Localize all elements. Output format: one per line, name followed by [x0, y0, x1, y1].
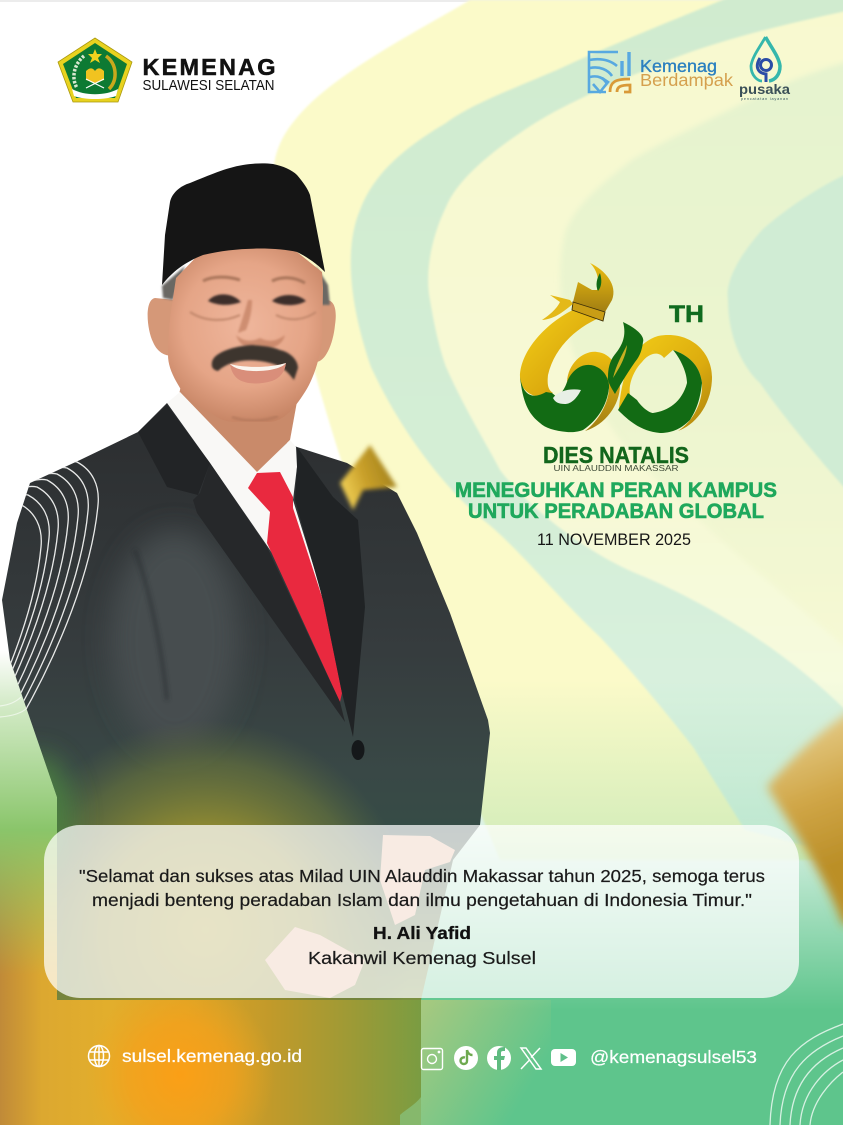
jacket button — [352, 740, 364, 760]
logo: pusaka: pencatatan layanan — [741, 97, 788, 101]
quote card — [44, 825, 799, 998]
neck — [178, 380, 300, 473]
icon: tiktok — [454, 1046, 478, 1070]
header brand text: KEMENAG — [142, 54, 276, 80]
nose shadow — [236, 300, 285, 349]
number 6 green swirl — [520, 364, 610, 432]
torch collar — [572, 302, 605, 321]
title block — [455, 442, 777, 549]
logo: Kemenag Berdampak: Kemenag — [640, 56, 717, 76]
theme line two: UNTUK PERADABAN GLOBAL — [468, 500, 764, 523]
TH: TH — [669, 301, 704, 328]
icon: X — [521, 1048, 541, 1069]
logo: pusaka: pusaka — [739, 81, 790, 97]
suit lighting and fade — [10, 462, 380, 1000]
header brand text: SULAWESI SELATAN — [142, 77, 274, 94]
role: Kakanwil Kemenag Sulsel — [308, 948, 536, 968]
footer website: sulsel.kemenag.go.id — [122, 1046, 302, 1066]
ears — [148, 298, 336, 362]
logo: Kemenag Berdampak — [589, 52, 733, 92]
left lapel — [138, 405, 210, 495]
person portrait — [0, 163, 490, 1000]
white cloud — [553, 389, 581, 404]
face — [168, 246, 323, 422]
red tie — [248, 472, 342, 702]
torch ribbon — [542, 295, 573, 320]
quote text — [79, 866, 765, 910]
footer social — [422, 1046, 757, 1070]
clasped hands — [265, 835, 455, 998]
quote text: menjadi benteng peradaban Islam dan ilmu pengetahuan di Indonesia Timur." — [92, 890, 752, 910]
number 0 gold — [619, 335, 712, 431]
university name: UIN ALAUDDIN MAKASSAR — [554, 463, 678, 473]
line pattern bottom right — [770, 1024, 843, 1125]
footer social: @kemenagsulsel53 — [590, 1047, 757, 1067]
suit jacket — [2, 403, 490, 1000]
number 6 gold body — [520, 310, 604, 396]
Dies Natalis heading: DIES NATALIS — [543, 442, 689, 468]
right lapel — [295, 447, 365, 737]
eyes and brows — [190, 277, 316, 320]
chin shadow — [232, 416, 278, 421]
moustache — [212, 345, 298, 380]
faint lines on background left — [0, 697, 27, 717]
icon: youtube — [551, 1049, 576, 1066]
number 6 gold loop — [567, 352, 620, 431]
logo: Kemenag emblem — [58, 38, 132, 102]
icon: instagram — [422, 1048, 442, 1070]
icon: globe — [88, 1045, 110, 1067]
decorative gold blur right — [767, 705, 843, 925]
peci cap — [162, 163, 325, 285]
leaf — [608, 322, 643, 394]
left lapel lower — [193, 463, 345, 722]
teeth — [230, 363, 286, 371]
logo: Kemenag Berdampak: Berdampak — [640, 70, 733, 90]
grey hair sides — [162, 266, 330, 305]
logo: pusaka — [739, 37, 790, 101]
number 0 green crescent — [618, 350, 702, 433]
torch flame inner — [597, 273, 601, 291]
quote text: "Selamat dan sukses atas Milad UIN Alauddin Makassar tahun 2025, semoga terus — [79, 866, 765, 886]
logo: 60 TH — [520, 263, 712, 433]
header brand text — [142, 54, 276, 94]
torch — [573, 263, 613, 312]
date: 11 NOVEMBER 2025 — [537, 530, 691, 549]
theme line one: MENEGUHKAN PERAN KAMPUS — [455, 479, 777, 502]
name: H. Ali Yafid — [373, 923, 471, 943]
icon: facebook — [487, 1046, 511, 1070]
smile — [230, 363, 286, 383]
gold ribbon blur near shoulder — [340, 445, 397, 510]
leaf inner highlight — [613, 345, 627, 378]
white shirt — [167, 392, 330, 640]
